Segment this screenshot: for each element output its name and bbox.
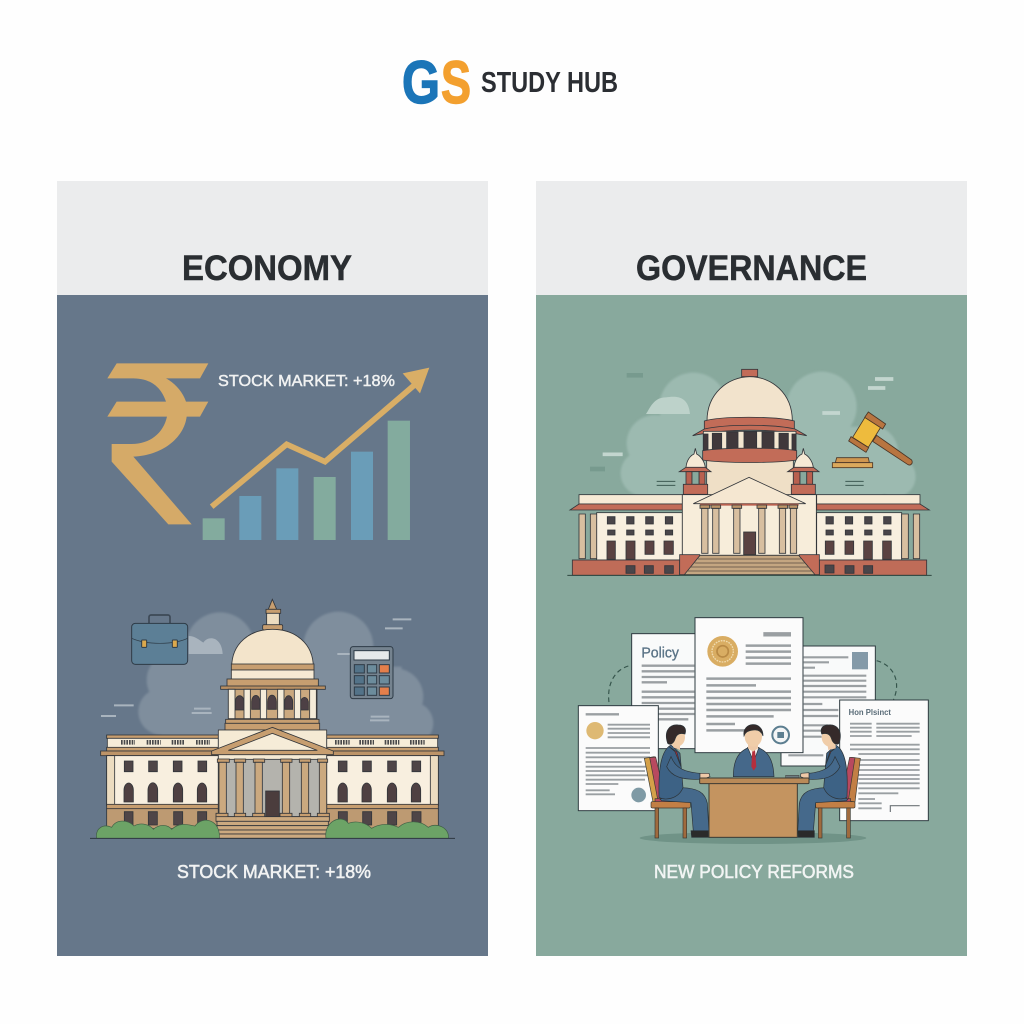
logo: GS Study Hub: G [402,49,440,116]
person: center [733,725,774,777]
document: left [578,706,658,811]
icon: rupee symbol [107,363,208,524]
document: back right [781,646,875,766]
heading: economy: ECONOMY [182,249,352,288]
stairs base [680,555,700,575]
building [570,369,929,575]
ground line [90,837,455,840]
floor shadow [640,832,866,844]
illustration: parliament building [90,599,455,838]
chair: right [816,757,860,838]
left turret [686,448,705,469]
person: left [659,725,710,837]
steps [216,817,329,821]
heading: governance: GOVERNANCE [636,249,867,288]
clouds [621,372,916,497]
right turret [794,448,813,469]
windows [607,517,891,573]
shrubs [96,819,448,838]
building [101,599,444,838]
arrow: market trend [212,368,429,507]
portico [218,730,327,760]
left wing [579,495,682,504]
panel: economy [57,181,488,956]
icon: rupee symbol and rising bar chart [107,363,429,540]
caption: stock market: STOCK MARKET: +18% [177,862,371,882]
icon: calculator [350,647,393,699]
icon: round stamp [772,727,789,743]
illustration: supreme court [567,369,932,575]
document: policy [632,634,695,749]
clouds [138,612,433,745]
chair: left [644,757,690,838]
logo: GS Study Hub: S [441,49,471,116]
caption: new policy reforms: NEW POLICY REFORMS [654,862,854,882]
bar chart [203,421,410,540]
dashes [101,619,411,720]
drum [228,689,317,719]
dashes [603,379,893,454]
wing windows [124,761,421,825]
person: right [798,725,848,837]
icon: briefcase [132,615,188,664]
icon: gold seal [707,636,738,667]
dome [742,369,758,377]
central drum [707,460,793,497]
document: right [840,700,928,821]
right wing [817,495,920,504]
panel: governance [536,181,967,956]
portico [682,495,816,555]
lantern [268,599,277,609]
dome [232,629,313,667]
columns [702,508,797,553]
logo: GS Study Hub: STUDY HUB [481,67,618,99]
left wing [107,735,218,738]
illustration: policy documents and meeting [578,618,928,844]
logo: GS Study Hub [402,49,618,116]
document: central with seal [695,618,803,753]
ground line [567,574,932,577]
balustrade marks [121,735,425,749]
document: right: Hon Plsinct [849,708,891,717]
icon: gavel [832,412,912,468]
right wing [327,735,438,738]
table [700,775,809,837]
pediment [693,477,806,504]
label: stock market chart: STOCK MARKET: +18% [218,373,395,390]
document: policy: Policy [641,645,679,662]
dashed arcs [609,661,897,703]
side columns [579,514,920,559]
